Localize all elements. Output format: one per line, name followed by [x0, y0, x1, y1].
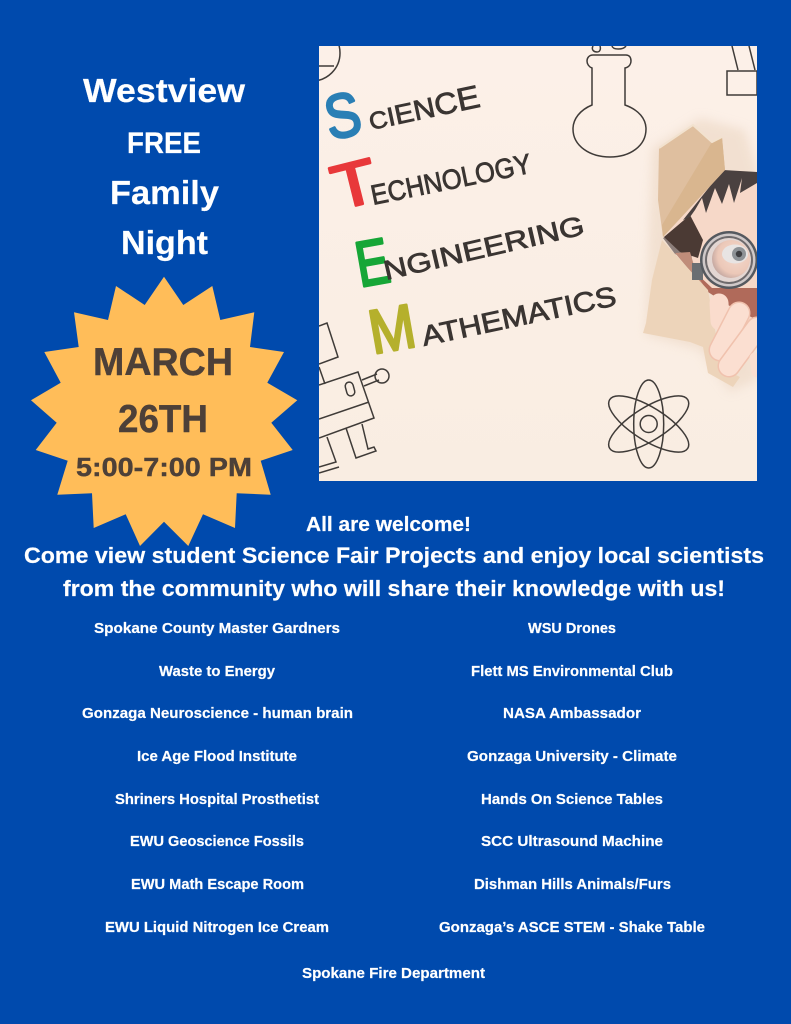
face	[666, 181, 757, 319]
word: Science: CIENCE	[365, 78, 483, 137]
exhibitor list: right column: Hands On Science Tables	[481, 792, 663, 808]
date and time: 26TH	[118, 398, 208, 441]
ear and neck shadow	[675, 252, 704, 286]
date and time: MARCH	[93, 341, 233, 384]
exhibitor list: right column	[439, 621, 705, 936]
icon: magnifying lens	[692, 231, 758, 289]
intro text: Come view student Science Fair Projects and enjoy local scientists	[24, 543, 764, 568]
exhibitor list: right column: Flett MS Environmental Club	[471, 664, 673, 680]
word: Mathematics	[368, 287, 616, 354]
exhibitor list: right column: Dishman Hills Animals/Furs	[474, 877, 671, 893]
starburst shape	[31, 277, 297, 546]
title: FREE	[127, 127, 201, 160]
exhibitor: Spokane Fire Department: Spokane Fire Department	[302, 966, 485, 982]
word: Technology	[328, 153, 529, 207]
date badge	[31, 277, 297, 546]
lower paper flap	[643, 240, 740, 387]
word: Technology: T	[325, 146, 384, 224]
exhibitor list: right column: Gonzaga University - Climate	[467, 749, 677, 765]
title	[83, 72, 245, 261]
panel: STEM photo	[319, 46, 757, 481]
exhibitor list: left column: Shriners Hospital Prosthetist	[115, 792, 319, 808]
word: Mathematics: ATHEMATICS	[419, 280, 619, 352]
exhibitor list: left column	[82, 621, 353, 936]
intro text	[24, 514, 764, 601]
exhibitor list: right column: NASA Ambassador	[503, 706, 641, 722]
icon: atom	[608, 379, 690, 469]
word: Engineering: NGINEERING	[381, 211, 587, 286]
date and time	[76, 341, 252, 482]
upper paper flap	[658, 125, 725, 237]
word: Engineering: E	[350, 224, 395, 301]
STEM words	[326, 85, 616, 354]
exhibitor list: left column: EWU Liquid Nitrogen Ice Cream	[105, 920, 329, 936]
exhibitor list: left column: Ice Age Flood Institute	[137, 749, 297, 765]
title: Night	[121, 224, 208, 261]
title: Family	[110, 174, 220, 211]
gray backdrop in hole	[663, 237, 692, 258]
hair fringe	[683, 170, 757, 220]
title: Westview	[83, 72, 245, 109]
exhibitor list: left column: Waste to Energy	[159, 664, 275, 680]
intro text: All are welcome!	[306, 514, 471, 536]
paper shadow	[645, 118, 757, 392]
icon: globe corner	[319, 46, 341, 81]
icon: microscope corner	[727, 46, 757, 95]
word: Mathematics: M	[363, 292, 421, 368]
word: Science: S	[319, 79, 367, 154]
icon: robot	[319, 323, 389, 473]
icon: flask	[573, 46, 646, 157]
exhibitor list: left column: EWU Math Escape Room	[131, 877, 304, 893]
exhibitor list: right column: WSU Drones	[528, 621, 616, 637]
exhibitor list: left column: Gonzaga Neuroscience - human brain	[82, 706, 353, 722]
illustration: child peeking through torn paper	[643, 118, 758, 392]
fingers	[719, 303, 757, 372]
dark hair at side of face	[664, 215, 703, 258]
exhibitor list: left column: Spokane County Master Gardners	[94, 621, 340, 637]
word: Technology: ECHNOLOGY	[368, 148, 534, 211]
intro text: from the community who will share their knowledge with us!	[63, 576, 725, 601]
word: Science	[326, 85, 480, 139]
exhibitor list: right column: SCC Ultrasound Machine	[481, 834, 663, 850]
exhibitor list: left column: EWU Geoscience Fossils	[130, 834, 304, 850]
date and time: 5:00-7:00 PM	[76, 452, 252, 482]
exhibitor list: right column: Gonzaga’s ASCE STEM - Shake Table	[439, 920, 705, 936]
